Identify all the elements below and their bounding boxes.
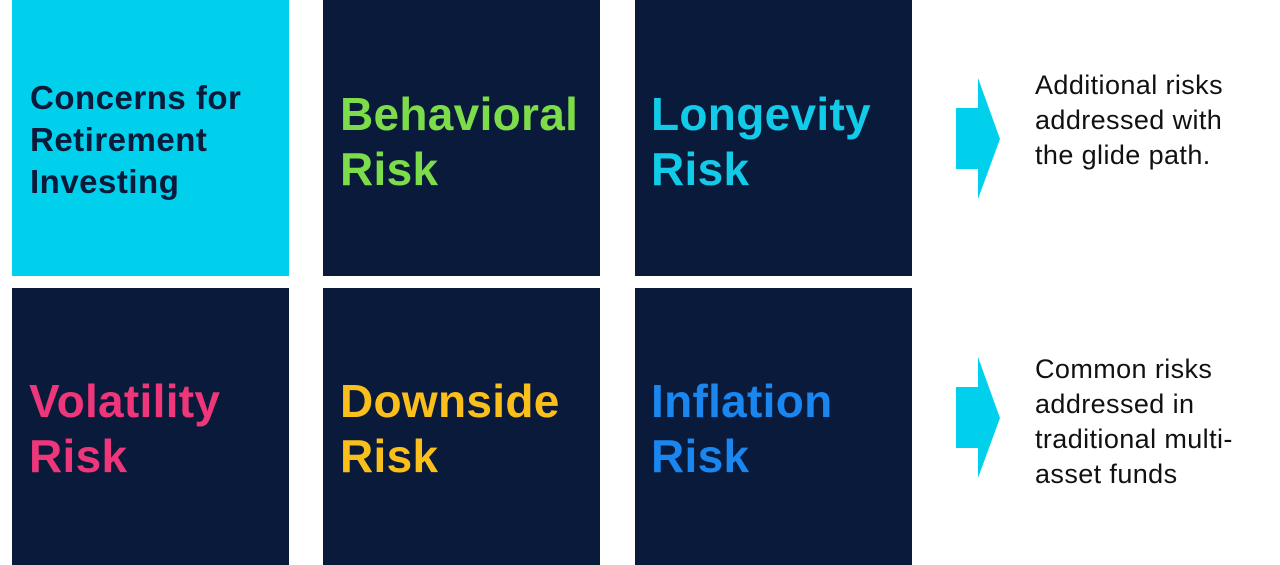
tile: inflation risk: Risk (651, 430, 749, 482)
text: common risks: Common risks (1035, 354, 1212, 384)
tile: inflation risk: Inflation (651, 375, 833, 427)
text: additional risks: Additional risks (1035, 70, 1223, 100)
tile: behavioral risk (323, 0, 600, 276)
tile: behavioral risk: Behavioral (340, 88, 578, 140)
text: additional risks: the glide path. (1035, 140, 1211, 170)
tile: inflation risk (635, 288, 912, 565)
tile: longevity risk (635, 0, 912, 276)
tile: downside risk (323, 288, 600, 565)
tile: concerns: Retirement (30, 121, 207, 158)
tile: behavioral risk: Risk (340, 143, 438, 195)
tile: downside risk: Risk (340, 430, 438, 482)
text: common risks (1035, 354, 1233, 489)
tile: concerns: Investing (30, 163, 179, 200)
tile: volatility risk: Volatility (29, 375, 220, 427)
text: additional risks: addressed with (1035, 105, 1222, 135)
text: common risks: asset funds (1035, 459, 1178, 489)
tile: concerns: Concerns for (30, 79, 241, 116)
tile: longevity risk: Longevity (651, 88, 871, 140)
text: common risks: addressed in (1035, 389, 1194, 419)
text: additional risks (1035, 70, 1223, 170)
tile: volatility risk: Risk (29, 430, 127, 482)
tile: downside risk: Downside (340, 375, 560, 427)
tile: volatility risk (12, 288, 289, 565)
tile: longevity risk: Risk (651, 143, 749, 195)
tile: concerns (12, 0, 289, 276)
text: common risks: traditional multi- (1035, 424, 1233, 454)
